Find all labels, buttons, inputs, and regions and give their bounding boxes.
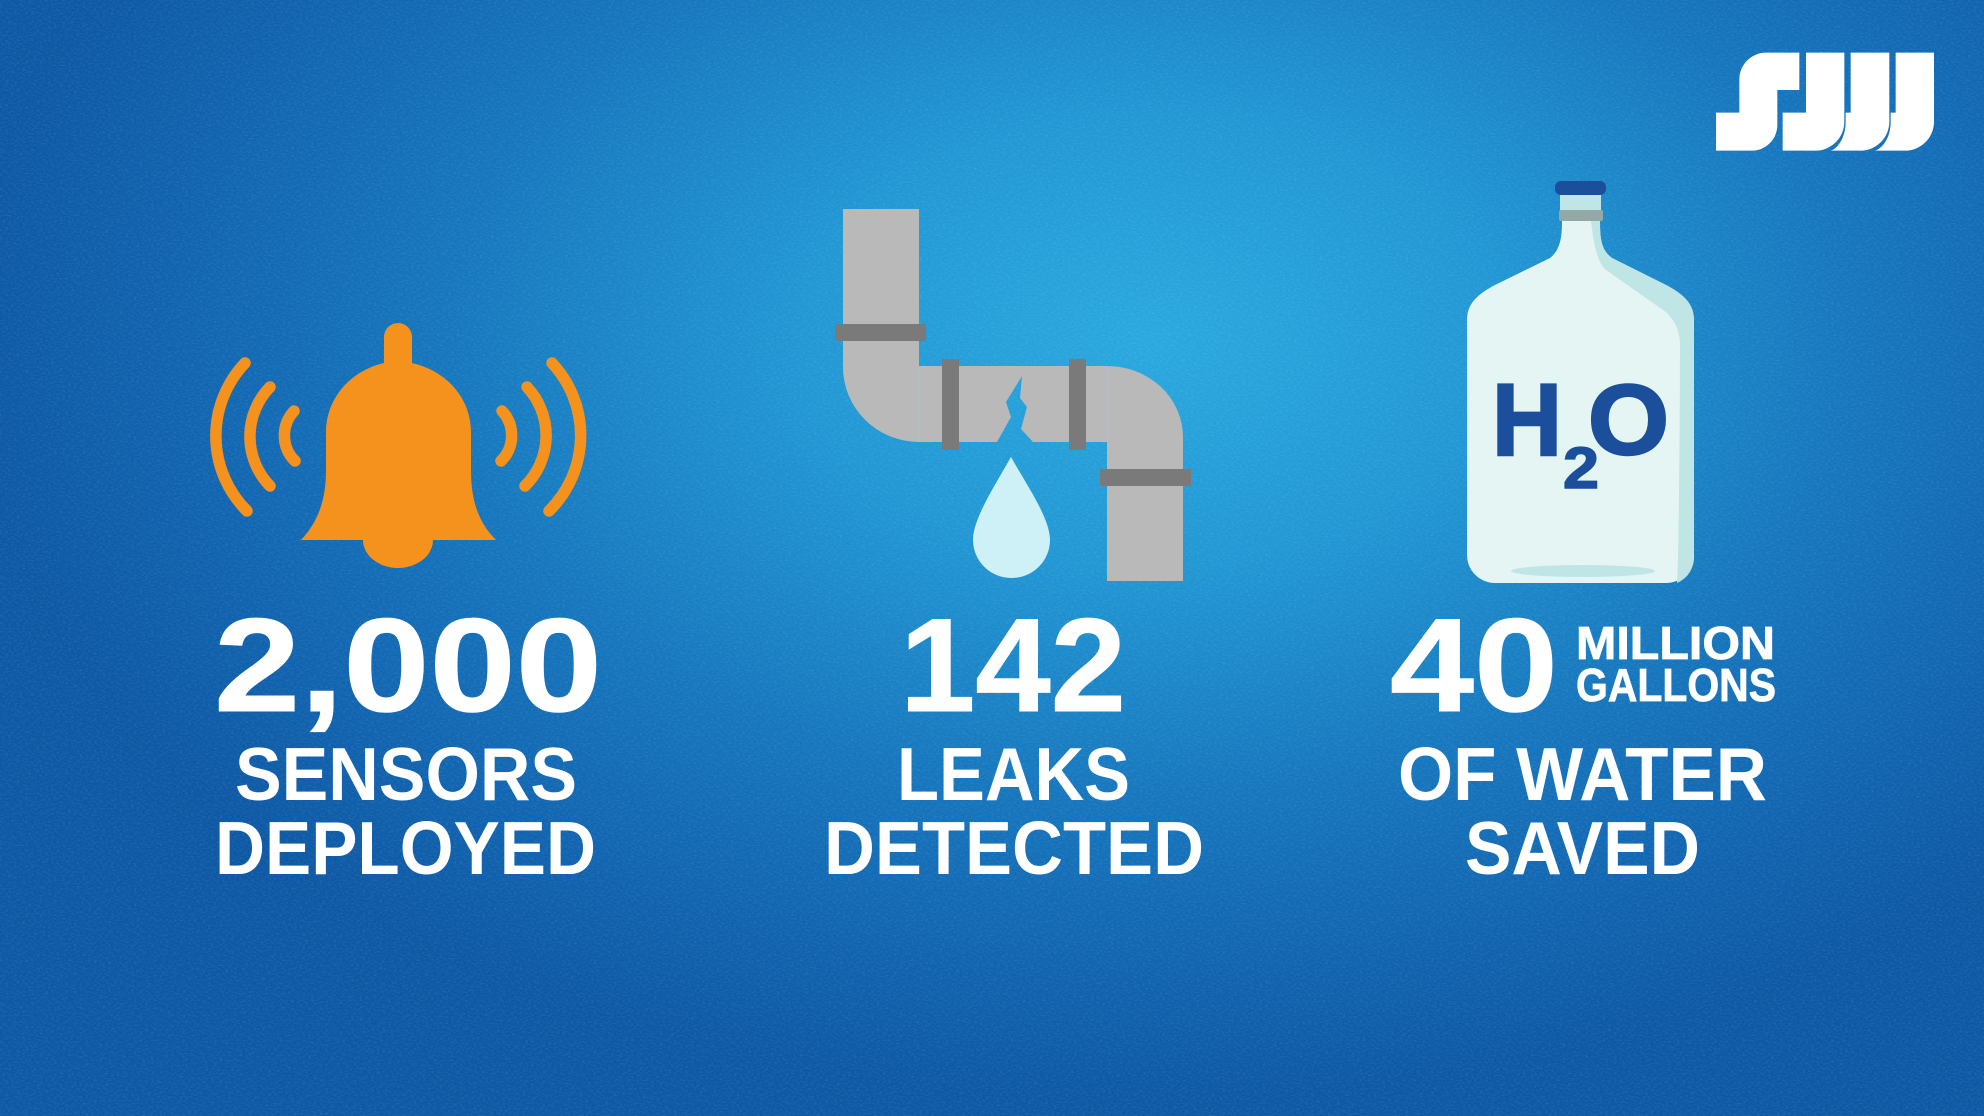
H2O label	[1492, 363, 1669, 501]
label: OF WATER	[1398, 732, 1767, 816]
number: 2,000	[214, 592, 602, 740]
clamps	[835, 324, 1191, 486]
water drop	[973, 457, 1050, 578]
label: SENSORS	[235, 732, 577, 816]
neck	[1560, 195, 1601, 211]
unit: MILLION	[1576, 617, 1775, 669]
stat: sensors deployed: DEPLOYED	[215, 806, 596, 890]
unit	[1576, 617, 1776, 711]
stat: sensors deployed	[214, 592, 602, 890]
number: 40	[1390, 592, 1558, 740]
cap	[1555, 181, 1606, 195]
label: LEAKS	[897, 732, 1130, 816]
bottle shading	[1591, 221, 1694, 583]
icon: water bottle	[1467, 181, 1694, 583]
pipe	[843, 209, 1183, 581]
icon: bell with sound waves	[216, 323, 581, 568]
stat: leaks detected	[824, 592, 1204, 890]
stat: water saved: SAVED	[1465, 806, 1700, 890]
H2O label: H	[1492, 363, 1562, 477]
icon: broken pipe with drop	[835, 209, 1191, 581]
bottle body	[1467, 221, 1694, 583]
stat: leaks detected: DETECTED	[824, 806, 1204, 890]
pipe seams	[919, 366, 1107, 442]
bell	[301, 323, 496, 568]
stat: water saved	[1390, 592, 1776, 890]
base ellipse	[1511, 565, 1655, 577]
number: 142	[900, 592, 1126, 740]
unit: GALLONS	[1576, 659, 1776, 711]
sound waves	[216, 363, 581, 511]
H2O label: 2	[1563, 436, 1599, 501]
logo	[1716, 53, 1934, 151]
ring	[1559, 210, 1603, 221]
H2O label: O	[1588, 364, 1669, 475]
